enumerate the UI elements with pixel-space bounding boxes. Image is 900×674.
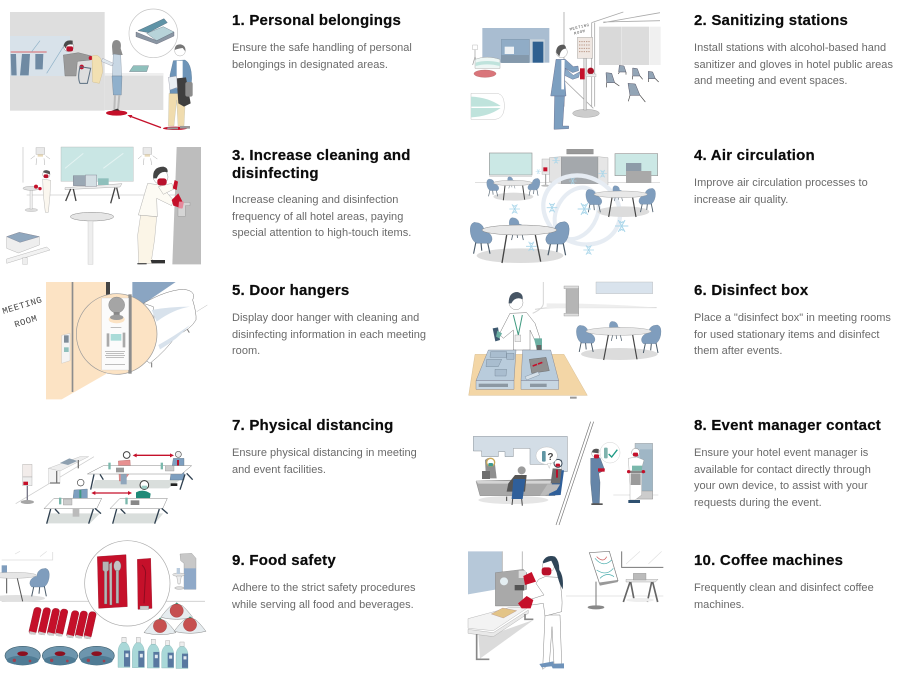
white sofa — [143, 289, 207, 367]
woman guest — [101, 40, 123, 111]
illustration: guest using a sanitizing station — [470, 12, 660, 130]
wall and ceiling lines — [564, 12, 660, 108]
diagonal divider — [556, 422, 594, 525]
meeting table and chairs — [576, 321, 661, 360]
heading: 9. Food safety — [232, 552, 336, 569]
panel: 10. Coffee machines — [468, 551, 874, 670]
row of napkin rolls — [29, 607, 96, 639]
description: room. — [232, 345, 260, 357]
description: available for contact directly through — [694, 464, 871, 476]
panel: 4. Air circulation — [470, 147, 868, 264]
description: for used stationary items and disinfect — [694, 328, 879, 340]
man using sanitizer — [551, 45, 580, 129]
used items box — [476, 350, 516, 389]
covered fruit plates — [144, 602, 206, 635]
meeting room with screens and chairs — [599, 27, 661, 102]
panel: 8. Event manager contact — [473, 417, 881, 526]
illustration: handing over personal belongings at a cloakroom — [10, 8, 193, 130]
room background — [533, 282, 657, 316]
illustration: door hanger on a meeting room door — [1, 282, 208, 400]
heading: 4. Air circulation — [694, 147, 815, 164]
disinfect box — [521, 350, 559, 389]
snowflakes — [509, 157, 628, 255]
description — [694, 42, 893, 87]
grey door — [172, 147, 201, 264]
description — [232, 447, 417, 476]
description: and meeting and event spaces. — [694, 75, 847, 87]
meeting room wall text: MEETING — [1, 295, 44, 317]
skyline window — [473, 436, 567, 472]
cloakroom wall and counter — [10, 12, 163, 111]
magnifying circle with door hanger — [76, 294, 157, 374]
meeting room sign: ROOM — [574, 30, 586, 37]
back wall with screens and door — [475, 149, 660, 187]
description: Place a "disinfect box" in meeting rooms — [694, 312, 891, 324]
illustration: distanced seating at meeting tables — [16, 451, 194, 524]
illustration: guest contacting the event manager — [473, 422, 658, 526]
description — [694, 582, 874, 610]
back left table — [487, 177, 540, 201]
check speech bubble — [600, 442, 620, 463]
description: special attention to high-touch items. — [232, 227, 411, 239]
beige door — [46, 282, 110, 399]
description: Ensure the safe handling of personal — [232, 42, 412, 54]
floor line and back table — [16, 457, 94, 504]
table top — [469, 354, 587, 399]
wrapped food rings — [5, 646, 114, 665]
lounge room with sofas — [471, 28, 549, 119]
description: Ensure physical distancing in meeting — [232, 447, 417, 459]
description — [232, 312, 426, 357]
question speech bubble — [536, 447, 557, 468]
coffee counter — [468, 607, 533, 659]
description: them after events. — [694, 345, 782, 357]
heading: 3. Increase cleaning and — [232, 147, 411, 164]
description: Adhere to the strict safety procedures — [232, 582, 416, 594]
description — [232, 582, 416, 610]
window and wall — [468, 551, 663, 596]
swirling air — [532, 163, 631, 257]
magnified box — [129, 9, 178, 72]
red distancing arrows — [91, 453, 174, 495]
heading: 5. Door hangers — [232, 282, 350, 299]
table with supplies — [65, 175, 122, 203]
meeting room sign: MEETING — [570, 24, 590, 33]
question speech bubble: ? — [547, 452, 553, 463]
heading: 7. Physical distancing — [232, 417, 394, 434]
water bottles — [118, 637, 188, 669]
room background — [0, 551, 205, 602]
coffee machine — [491, 569, 527, 618]
description: while serving all food and beverages. — [232, 598, 414, 610]
heading: 2. Sanitizing stations — [694, 12, 848, 29]
panel: 7. Physical distancing — [16, 417, 417, 524]
description: increase air quality. — [694, 194, 788, 206]
illustration: wrapped cutlery, covered food and bottled drinks — [0, 540, 206, 669]
description: Display door hanger with cleaning and — [232, 312, 419, 324]
description — [694, 177, 868, 206]
room background with lamps and glass — [23, 147, 177, 195]
description: Ensure your hotel event manager is — [694, 447, 868, 459]
panel: 5. Door hangers — [1, 282, 426, 400]
description: Increase cleaning and disinfection — [232, 194, 398, 206]
description — [694, 447, 871, 508]
waiting guest with coat — [167, 44, 193, 129]
illustration: staff cleaning a coffee machine — [468, 551, 664, 670]
small figure cleaning a table — [23, 170, 51, 212]
heading: disinfecting — [232, 165, 319, 182]
back row tables with people — [87, 451, 193, 490]
description: and event facilities. — [232, 464, 326, 476]
description: sanitizer and gloves in hotel public areas — [694, 58, 893, 70]
description: requests during the event. — [694, 496, 822, 508]
yellow coat — [92, 55, 103, 83]
description — [694, 312, 891, 357]
description: Install stations with alcohol-based hand — [694, 42, 886, 54]
side table with machine — [623, 573, 658, 602]
sanitizing stand — [573, 37, 599, 117]
red floor markers and distancing arrow — [106, 110, 187, 130]
description — [232, 42, 412, 70]
magnified cutlery — [85, 541, 170, 626]
meeting desk and people — [476, 458, 564, 506]
front row tables with people — [44, 479, 168, 524]
event manager — [591, 449, 605, 505]
description: frequency of all hotel areas, paying — [232, 210, 403, 222]
woman with mask and red gloves — [518, 556, 564, 669]
description — [232, 194, 411, 239]
heading: 6. Disinfect box — [694, 282, 808, 299]
heading: 8. Event manager contact — [694, 417, 881, 434]
server with tray and drinks fridge — [613, 443, 658, 503]
description: your own device, to assist with your — [694, 480, 868, 492]
illustration: staff disinfecting a door handle — [6, 146, 201, 264]
panel: 6. Disinfect box — [468, 282, 891, 399]
description: disinfecting information in each meeting — [232, 328, 426, 340]
panel: 2. Sanitizing stations — [470, 12, 893, 130]
sanitizer stand — [21, 464, 34, 504]
water dispenser — [173, 553, 196, 589]
heading: 1. Personal belongings — [232, 12, 401, 29]
illustration: staff sorting used stationery into a disinfect box — [468, 282, 662, 399]
man disinfecting the door handle — [137, 167, 190, 264]
front table — [470, 218, 569, 263]
staff member with mask — [63, 40, 93, 83]
heading — [232, 147, 411, 182]
disinfect box on side table — [7, 232, 50, 264]
description: machines. — [694, 598, 744, 610]
meeting room wall text — [1, 295, 44, 330]
description: Improve air circulation processes to — [694, 177, 868, 189]
flip chart on stand — [588, 551, 618, 609]
staff member with lanyard — [493, 292, 542, 350]
heading: 10. Coffee machines — [694, 552, 843, 569]
back right table — [586, 186, 655, 217]
panel: 3. Increase cleaning and disinfecting — [6, 146, 411, 264]
illustration: air circulating through a meeting room — [470, 149, 660, 264]
description: belongings in designated areas. — [232, 58, 388, 70]
round table in foreground — [70, 212, 114, 264]
meeting room wall text: ROOM — [13, 314, 39, 330]
blue window — [132, 282, 176, 304]
description: Frequently clean and disinfect coffee — [694, 582, 874, 594]
panel: 1. Personal belongings — [10, 8, 412, 130]
panel: 9. Food safety — [0, 540, 416, 669]
